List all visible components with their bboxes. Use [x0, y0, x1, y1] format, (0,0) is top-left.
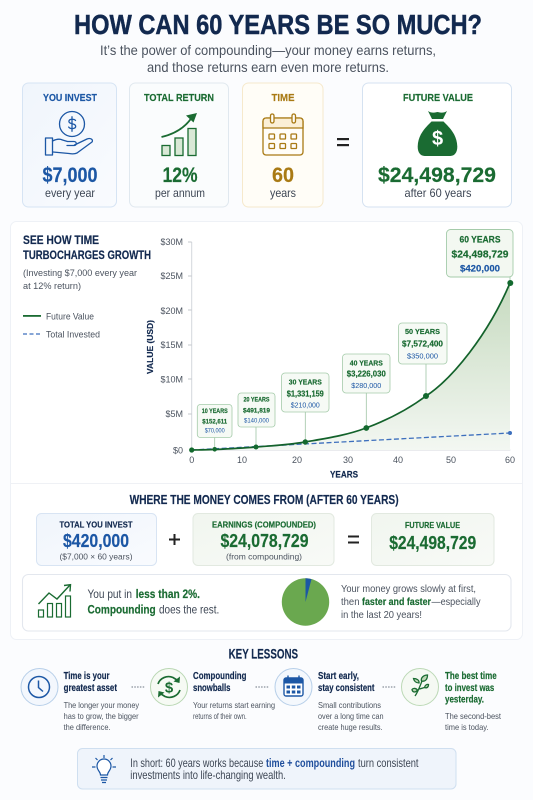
text: grows slowly then faster: —especially	[432, 597, 480, 608]
callout: 30 years: $1,331,159	[287, 390, 324, 398]
lesson: time is your greatest asset	[21, 668, 140, 732]
box: total you invest	[36, 514, 156, 566]
callout: 40 years: 40 YEARS	[350, 358, 383, 368]
box: earnings: $24,078,729	[220, 530, 308, 551]
y axis: $15M	[160, 340, 183, 350]
callout: in short	[78, 748, 456, 789]
lesson: compounding snowballs: returns of their own.	[193, 711, 247, 721]
icon: growth chart	[38, 585, 70, 617]
lesson: best time: to invest was	[445, 682, 494, 694]
lesson: start early: Start early,	[318, 670, 359, 682]
icon: money bag: $	[432, 128, 443, 150]
lesson: best time	[402, 668, 502, 732]
lesson: start early: stay consistent	[318, 682, 375, 694]
card: time: years	[270, 186, 296, 200]
lesson: compounding snowballs: Compounding	[193, 670, 246, 682]
icon: money bag	[418, 111, 457, 156]
x axis	[189, 450, 515, 480]
card: future value: after 60 years	[404, 186, 472, 200]
x axis: 30	[343, 455, 353, 465]
x axis: 10	[237, 455, 247, 465]
connector dots	[256, 686, 269, 688]
text: less than 2%	[88, 587, 219, 616]
lesson: time is your greatest asset: The longer your money	[64, 700, 140, 710]
card: total return: TOTAL RETURN	[144, 92, 214, 104]
y axis: $10M	[160, 374, 183, 384]
callout: 30 years: 30 YEARS	[289, 378, 322, 386]
callout: in short: turn consistent	[358, 756, 419, 770]
card: time: TIME	[272, 92, 294, 104]
y axis: $30M	[160, 237, 183, 247]
lesson: start early: over a long time can	[318, 711, 384, 721]
card: you invest: every year	[45, 186, 95, 200]
icon: rising bars	[162, 113, 197, 156]
callout: 60 years: $420,000	[460, 264, 500, 274]
icon: calendar	[263, 114, 303, 155]
card: future value: $24,498,729	[378, 164, 496, 187]
line chart	[145, 230, 515, 480]
card: total return: per annum	[155, 186, 205, 200]
chart legend: Total Invested	[46, 330, 100, 340]
text: less than 2%: less than 2%.	[136, 587, 200, 601]
lesson: best time: The best time	[445, 670, 497, 682]
callout: 50 years	[398, 323, 447, 364]
text: grows slowly then faster: then	[341, 597, 360, 608]
plus sign	[169, 534, 180, 545]
box: total you invest: $420,000	[63, 530, 129, 551]
subtitle: and those returns earn even more returns.	[147, 59, 389, 75]
chart legend: Future Value	[46, 312, 94, 322]
callout: 50 years: $350,000	[407, 352, 438, 360]
box: future value	[372, 514, 494, 566]
box: earnings	[193, 514, 334, 566]
callout: 20 years: $140,000	[244, 418, 270, 424]
connector dots	[382, 686, 396, 688]
chart heading: at 12% return)	[23, 281, 81, 292]
callout: 10 years: 10 YEARS	[202, 409, 228, 415]
box: total you invest: ($7,000 × 60 years)	[60, 552, 133, 562]
card: you invest	[22, 83, 116, 207]
lesson: best time: time is today.	[445, 722, 488, 732]
text: grows slowly then faster: faster and faster	[362, 597, 431, 608]
chart legend	[23, 312, 100, 340]
box: future value: FUTURE VALUE	[405, 520, 460, 530]
panel: growth and money source	[10, 222, 522, 789]
x axis: YEARS	[330, 470, 358, 480]
x axis: 60	[505, 455, 515, 465]
callout: 10 years: $152,611	[202, 418, 228, 426]
equals sign	[337, 138, 349, 146]
stems	[215, 277, 510, 449]
box: total you invest: TOTAL YOU INVEST	[60, 520, 133, 530]
icon: sprout	[402, 668, 438, 706]
subtitle: It’s the power of compounding—your money earns returns,	[100, 42, 436, 58]
invested line	[192, 431, 512, 450]
card: you invest: YOU INVEST	[43, 92, 97, 104]
text: grows slowly then faster: in the last 20 years!	[341, 610, 422, 621]
callout: in short: In short: 60 years works because	[130, 756, 264, 770]
chart heading: SEE HOW TIME	[23, 235, 99, 247]
card: total return	[130, 83, 228, 207]
box: future value: $24,498,729	[389, 532, 476, 553]
text: grows slowly then faster: Your money grows slowly at first,	[341, 584, 476, 595]
lesson: best time: The second-best	[445, 711, 502, 721]
callout: 30 years	[282, 373, 329, 412]
x axis: 0	[189, 455, 194, 465]
callout: 50 years: $7,572,400	[402, 340, 444, 348]
callout: 40 years: $3,226,030	[347, 370, 386, 378]
chart heading	[23, 235, 151, 292]
future value curve	[192, 283, 510, 450]
y axis	[145, 237, 192, 456]
chart heading: (Investing $7,000 every year	[23, 268, 137, 279]
lesson: compounding snowballs: Your returns start earning	[193, 700, 275, 710]
icon: clock	[21, 668, 58, 706]
connector dots	[132, 686, 145, 688]
x axis: 40	[393, 455, 403, 465]
lesson: time is your greatest asset: greatest asset	[64, 682, 117, 694]
box: earnings: (from compounding)	[226, 552, 302, 562]
lesson: start early	[275, 668, 384, 732]
callout: 30 years: $210,000	[291, 400, 320, 410]
callout: 50 years: 50 YEARS	[405, 327, 440, 336]
lesson: time is your greatest asset: Time is your	[64, 670, 110, 682]
y axis: $5M	[165, 409, 183, 419]
icon: hand holding coin	[46, 112, 92, 155]
x axis: 50	[446, 455, 456, 465]
box: earnings: EARNINGS (COMPOUNDED)	[212, 520, 316, 530]
chart heading: TURBOCHARGES GROWTH	[23, 250, 151, 262]
callout: in short: time + compounding	[266, 756, 355, 770]
icon: light bulb	[92, 755, 116, 782]
data points	[189, 280, 513, 453]
text: grows slowly then faster	[341, 584, 480, 621]
panel: takeaway	[22, 574, 511, 631]
card: you invest: $7,000	[42, 164, 98, 187]
x axis: 20	[292, 455, 302, 465]
lesson: compounding snowballs	[150, 668, 275, 721]
pie chart	[282, 578, 329, 626]
lesson: start early: Small contributions	[318, 700, 381, 710]
card: future value	[362, 83, 512, 207]
lesson: start early: create huge results.	[318, 722, 383, 732]
card: time: 60	[272, 164, 294, 187]
callout: in short: investments into life-changing wealth.	[130, 768, 286, 782]
callout: 40 years: $280,000	[351, 381, 381, 390]
text: less than 2%: Compounding	[88, 602, 156, 616]
lesson: best time: yesterday.	[445, 694, 484, 706]
card: total return: 12%	[162, 164, 198, 187]
y axis: VALUE (USD)	[145, 320, 155, 374]
callout: 60 years: $24,498,729	[452, 248, 509, 260]
subtitle	[100, 42, 436, 75]
callout: 20 years: 20 YEARS	[244, 398, 270, 404]
card: future value: FUTURE VALUE	[403, 92, 473, 104]
callout: 60 years	[446, 230, 513, 277]
text: less than 2%: does the rest.	[159, 602, 219, 616]
callout: 40 years	[342, 354, 390, 393]
equals sign	[348, 536, 359, 544]
lesson: compounding snowballs: snowballs	[193, 682, 231, 694]
lesson: time is your greatest asset: the difference.	[64, 722, 111, 732]
y axis: $20M	[160, 306, 183, 316]
icon: dollar cycle: $	[165, 680, 174, 696]
area under curve	[192, 283, 510, 450]
text: less than 2%: You put in	[88, 587, 132, 601]
lesson: time is your greatest asset: has to grow, the bigger	[64, 711, 139, 721]
callout: 10 years	[197, 404, 232, 438]
card: time	[242, 83, 323, 207]
callout: 20 years: $491,819	[243, 408, 270, 414]
y axis: $25M	[160, 271, 183, 281]
y axis: $0	[173, 446, 183, 456]
section heading: where the money comes from: WHERE THE MONEY COMES FROM (AFTER 60 YEARS)	[130, 493, 399, 507]
callout: 10 years: $70,000	[205, 428, 225, 434]
callout: 20 years	[238, 393, 275, 427]
icon: calendar	[275, 668, 312, 706]
callout: 60 years: 60 YEARS	[460, 234, 500, 244]
heading: key lessons: KEY LESSONS	[229, 646, 298, 662]
